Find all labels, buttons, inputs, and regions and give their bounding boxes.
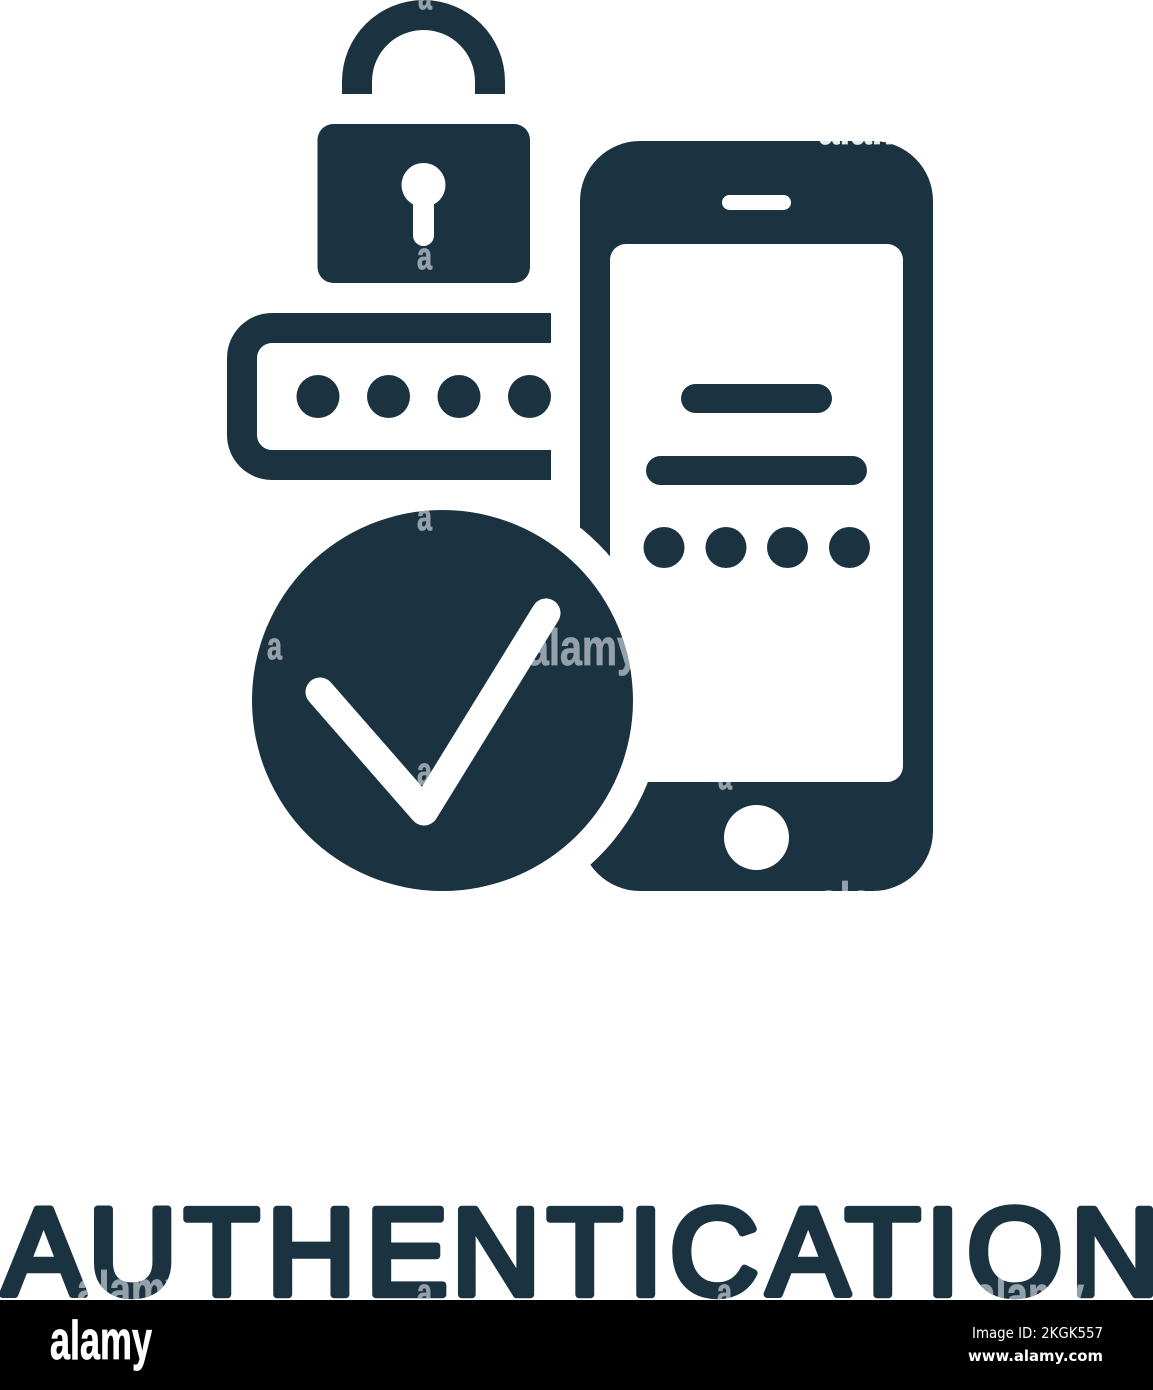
watermark: a xyxy=(267,626,283,668)
title: AUTHENTICATION xyxy=(2,1184,1153,1321)
watermark: a xyxy=(417,236,433,278)
watermark: a xyxy=(718,756,733,798)
watermark: a xyxy=(417,1272,433,1314)
watermark: a xyxy=(717,1272,733,1314)
watermark: alamy xyxy=(77,1261,187,1318)
icon: password field xyxy=(227,313,551,480)
image id: Image ID: 2KGK557 xyxy=(972,1324,1103,1342)
logo: alamy: alamy xyxy=(50,1309,152,1371)
footer bar xyxy=(0,1300,1153,1390)
icon: smartphone xyxy=(580,141,933,891)
icon: padlock xyxy=(318,0,530,283)
watermark: alamy xyxy=(974,1266,1084,1323)
website: www.alamy.com xyxy=(968,1347,1103,1365)
watermark: a xyxy=(417,751,433,793)
watermark: a xyxy=(417,497,433,539)
watermark: alam xyxy=(818,98,906,155)
watermark: alamy xyxy=(818,872,928,929)
icon: check badge xyxy=(252,510,633,891)
icon: authentication xyxy=(222,0,933,922)
watermark: alamy xyxy=(527,619,639,676)
